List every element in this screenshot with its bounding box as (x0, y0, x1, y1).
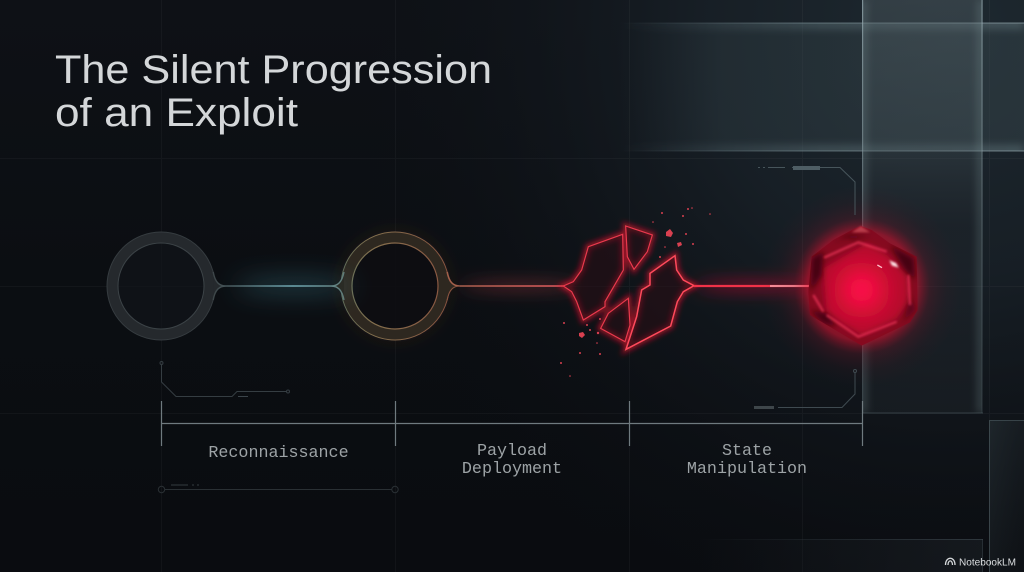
label: State Manipulation: Manipulation (687, 460, 807, 479)
connector: ring 2 to shattered node (447, 272, 580, 300)
stage 2 node: payload ring (339, 230, 451, 342)
icon: notebook mark (946, 558, 955, 565)
debris particles (560, 207, 711, 377)
connector: red beam (694, 281, 815, 291)
panel: horizontal glass (620, 19, 1024, 155)
dark facets (810, 232, 916, 327)
logo text: NotebookLM (959, 556, 1016, 568)
label: State Manipulation: State (722, 442, 772, 461)
label: Payload Deployment: Deployment (462, 460, 562, 479)
circuit trace: lower left (160, 362, 290, 396)
shard glow (563, 226, 694, 349)
circuit trace: lower right (754, 370, 856, 409)
label: Payload Deployment: Payload (477, 442, 547, 461)
NotebookLM logo (946, 556, 1016, 568)
panel: bottom glass (700, 539, 983, 572)
title (55, 48, 492, 135)
shards outline (563, 226, 694, 349)
title: of an Exploit (55, 91, 298, 135)
stage 4 node: red crystal (773, 203, 944, 370)
label: Payload Deployment (462, 442, 562, 479)
lower scale line (158, 485, 398, 493)
timeline bracket (161, 401, 863, 446)
crystal body (808, 225, 918, 346)
panel: vertical glass (859, 0, 985, 414)
label: State Manipulation (687, 442, 807, 479)
circuit trace: upper right (758, 166, 855, 215)
label: Reconnaissance: Reconnaissance (208, 444, 349, 463)
connector: ring 1 to ring 2 (213, 272, 355, 300)
panel: lower right glass (990, 420, 1024, 572)
title: The Silent Progression (55, 48, 492, 92)
stage 3 node: shattered ring (560, 207, 711, 377)
stage 1 node: reconnaissance ring (107, 232, 215, 340)
bright facet bands (813, 242, 910, 337)
